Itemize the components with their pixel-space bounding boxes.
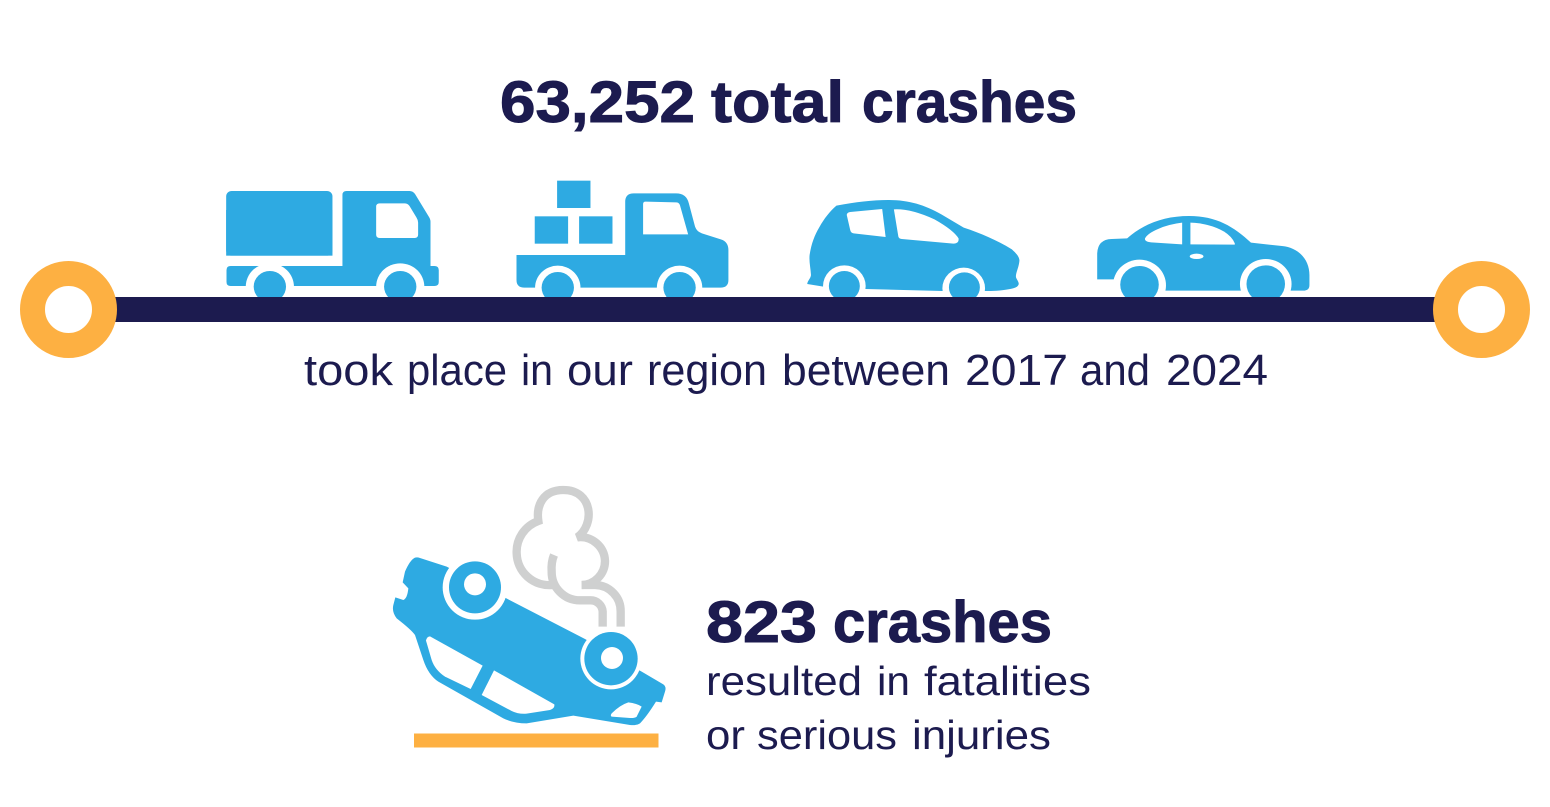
description line 2 <box>706 712 1051 758</box>
title <box>500 70 1077 135</box>
title: 63,252 <box>500 70 695 135</box>
subtitle: in <box>521 346 553 395</box>
subtitle: place <box>407 346 507 395</box>
car body <box>393 557 666 725</box>
icon: sedan car <box>1097 216 1309 311</box>
icon: pickup truck with boxes <box>517 181 728 310</box>
statistic: 823 crashes: crashes <box>833 590 1052 655</box>
subtitle: and <box>1080 346 1150 395</box>
smoke <box>517 490 621 627</box>
description line 2: or <box>706 712 745 758</box>
statistic: 823 crashes: 823 <box>706 590 817 655</box>
subtitle: our <box>567 346 633 395</box>
car wheels <box>443 555 642 689</box>
subtitle: 2017 <box>965 346 1068 395</box>
icon: overturned car with smoke <box>393 490 666 725</box>
subtitle: region <box>647 346 767 395</box>
right timeline marker <box>1446 274 1518 346</box>
subtitle: took <box>304 346 394 395</box>
ground line <box>414 734 658 748</box>
description line 1: resulted <box>706 658 862 704</box>
description line 1: in <box>877 658 910 704</box>
description line 1: fatalities <box>924 658 1091 704</box>
description line 2: serious <box>757 712 897 758</box>
subtitle: between <box>782 346 950 395</box>
description line 2: injuries <box>912 712 1051 758</box>
title: crashes <box>862 70 1077 135</box>
icon: hatchback car <box>807 200 1019 309</box>
title: total <box>711 70 844 135</box>
left timeline marker <box>32 274 104 346</box>
car windows <box>426 636 642 718</box>
icon: box truck <box>226 191 439 310</box>
description line 1 <box>706 658 1091 704</box>
statistic: 823 crashes <box>706 590 1052 655</box>
subtitle: 2024 <box>1166 346 1268 395</box>
timeline bar <box>68 297 1482 322</box>
subtitle <box>304 346 1268 395</box>
